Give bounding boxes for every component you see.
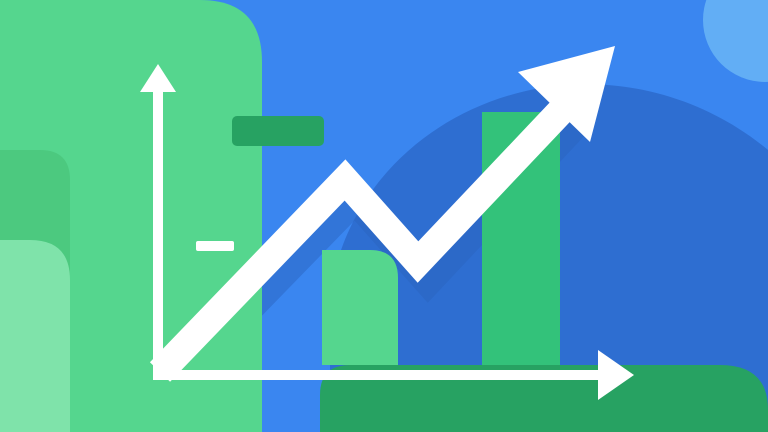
- shape: bottom dark green: [320, 365, 768, 432]
- bar 1: [322, 250, 398, 365]
- bar: dark green label: [232, 116, 324, 146]
- arrow: trend up: [160, 46, 615, 372]
- panel: left mid green: [0, 150, 70, 432]
- blob: dark blue background: [330, 84, 768, 432]
- bar 2: [482, 112, 560, 365]
- panel: left green: [0, 0, 262, 432]
- panel: left light green: [0, 240, 70, 432]
- axes: [140, 64, 634, 400]
- shadow: trend line: [175, 120, 580, 385]
- dash: white tick: [196, 241, 234, 251]
- circle: top-right light blue: [703, 0, 768, 82]
